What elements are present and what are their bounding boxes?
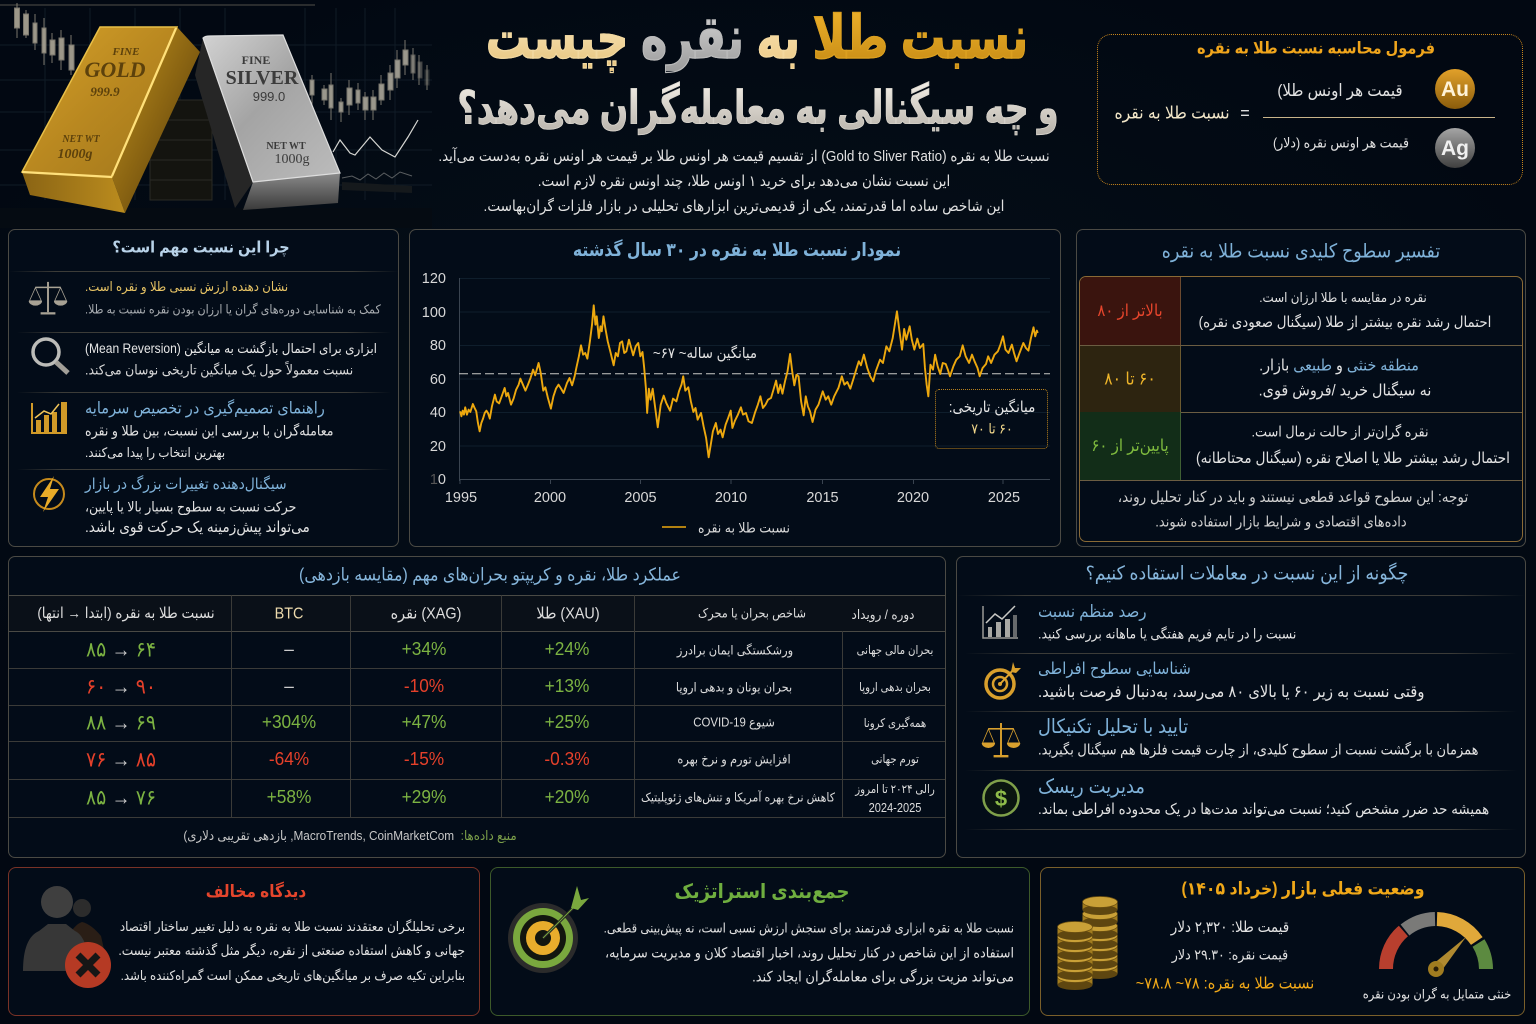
table header: (XAU) طلا bbox=[536, 605, 600, 622]
heading: چرا این نسبت مهم است؟ bbox=[112, 239, 290, 256]
panel: strategic summary: می‌تواند مزیت بزرگی برای معامله‌گران ایجاد کند. bbox=[752, 969, 1014, 985]
level 60 to 80: نه سیگنال خرید /فروش قوی. bbox=[1259, 382, 1431, 399]
icon: green target bbox=[508, 886, 589, 973]
panel: strategic summary bbox=[490, 867, 1030, 1016]
line chart: 80 bbox=[430, 338, 446, 354]
heading: چگونه از این نسبت در معاملات استفاده کنیم؟ bbox=[1086, 564, 1408, 585]
table heading: عملکرد طلا، نقره و کریپتو بحران‌های مهم (مقایسه بازدهی) bbox=[299, 564, 681, 584]
row: covid: همه‌گیری کرونا bbox=[864, 716, 926, 730]
row: covid: شیوع COVID-19 bbox=[693, 715, 775, 729]
panel: why it matters bbox=[8, 229, 399, 547]
item 3: راهنمای تصمیم‌گیری در تخصیص سرمایه bbox=[85, 399, 325, 417]
intro text: نسبت طلا به نقره (Gold to Sliver Ratio) از تقسیم قیمت هر اونس طلا بر قیمت هر اونس نقره به‌دست می‌آید. bbox=[438, 148, 1050, 165]
panel: why it matters: می‌تواند پیش‌زمینه یک حرکت قوی باشد. bbox=[85, 519, 310, 536]
intro text bbox=[438, 147, 1050, 215]
right candles bbox=[310, 40, 429, 122]
stacked shadow bars bbox=[150, 100, 212, 200]
table header: (XAG) نقره bbox=[391, 605, 461, 622]
table header: شاخص بحران یا محرک bbox=[698, 606, 806, 620]
panel: level interpretation bbox=[1076, 229, 1526, 547]
denominator: قیمت هر اونس نقره (دلار) bbox=[1273, 135, 1409, 151]
line chart: 40 bbox=[430, 405, 446, 421]
row: 2024 rally: +20% bbox=[545, 787, 589, 807]
gold bar: NET WT bbox=[61, 134, 101, 145]
hero illustration: gold and silver bars bbox=[0, 3, 432, 213]
icon: Ag: Ag bbox=[1441, 137, 1469, 160]
icon: Ag bbox=[1435, 128, 1475, 168]
row: inflation: ۷۶ → ۸۵ bbox=[86, 748, 156, 771]
line chart: 2010 bbox=[715, 490, 747, 506]
row: inflation bbox=[86, 748, 919, 771]
level above 80: احتمال رشد نقره بیشتر از طلا (سیگنال صعودی نقره) bbox=[1199, 315, 1491, 331]
formula heading: فرمول محاسبه نسبت طلا به نقره bbox=[1197, 39, 1435, 57]
icon: Au: Au bbox=[1441, 78, 1469, 101]
row: european debt crisis: ۶۰ → ۹۰ bbox=[86, 675, 156, 698]
level above 80 bbox=[1080, 277, 1522, 346]
icon: gold scales bbox=[982, 723, 1020, 758]
line chart: 100 bbox=[422, 305, 446, 321]
row: 2024 rally: 2024-2025 bbox=[869, 800, 921, 815]
intro text: این نسبت نشان می‌دهد برای خرید ۱ اونس طلا، چند اونس نقره لازم است. bbox=[538, 173, 950, 190]
level above 80: بالاتر از ۸۰ bbox=[1097, 301, 1163, 320]
row: 2024 rally bbox=[86, 782, 935, 815]
levels table bbox=[1079, 276, 1523, 542]
heading: تفسیر سطوح کلیدی نسبت طلا به نقره bbox=[1162, 240, 1440, 262]
step 3: تایید با تحلیل تکنیکال bbox=[1038, 716, 1188, 738]
row: european debt crisis: – bbox=[284, 676, 294, 696]
panel: opposing view bbox=[8, 867, 480, 1016]
icon: magnifier bbox=[31, 337, 70, 375]
average line label: میانگین ساله~ ۶۷~ bbox=[653, 346, 757, 362]
icon: monitoring chart bbox=[982, 606, 1018, 639]
legend: نسبت طلا به نقره bbox=[698, 520, 790, 536]
icon: gold target bbox=[984, 662, 1021, 700]
heading: دیدگاه مخالف bbox=[206, 882, 306, 901]
row: global financial crisis: +34% bbox=[402, 639, 446, 659]
panel: opposing view: بنابراین تکیه صرف بر میانگین‌های تاریخی ممکن است گمراه‌کننده باشد. bbox=[121, 968, 465, 983]
table header: دوره / رویداد bbox=[852, 607, 914, 622]
panel: why it matters: کمک به شناسایی دوره‌های گران یا ارزان بودن نقره نسبت به طلا. bbox=[85, 303, 381, 317]
step 4: مدیریت ریسک bbox=[1038, 776, 1145, 798]
icon: scales bbox=[28, 282, 68, 314]
row: covid bbox=[86, 711, 926, 734]
line chart: 2015 bbox=[806, 490, 839, 506]
panel: how to use bbox=[956, 556, 1526, 858]
line chart: 10 bbox=[430, 472, 446, 488]
row: european debt crisis: -10% bbox=[404, 676, 444, 696]
row: 2024 rally: +58% bbox=[267, 787, 311, 807]
row: european debt crisis bbox=[86, 675, 931, 698]
level below 60 bbox=[1080, 412, 1522, 481]
ratio label: نسبت طلا به نقره bbox=[1114, 103, 1230, 123]
silver bar: NET WT bbox=[266, 141, 306, 152]
equals sign: = bbox=[1240, 103, 1250, 123]
row: global financial crisis: – bbox=[284, 639, 294, 659]
level below 60: نقره گران‌تر از حالت نرمال است. bbox=[1251, 424, 1429, 440]
fraction bar bbox=[1263, 117, 1495, 118]
line chart: 2000 bbox=[534, 490, 566, 506]
chart heading: نمودار نسبت طلا به نقره در ۳۰ سال گذشته bbox=[573, 239, 901, 260]
panel: performance table bbox=[8, 556, 946, 858]
line chart: 2005 bbox=[624, 490, 657, 506]
intro text: این شاخص ساده اما قدرتمند، یکی از قدیمی‌ترین ابزارهای تحلیلی در بازار فلزات گران‌بهاست. bbox=[484, 198, 1004, 215]
row: 2024 rally: +29% bbox=[402, 787, 446, 807]
gold bar: GOLD bbox=[84, 57, 146, 82]
icon: dollar: $ bbox=[995, 786, 1007, 811]
row: 2024 rally: رالی ۲۰۲۴ تا امروز bbox=[855, 782, 935, 796]
line chart: 1995 bbox=[445, 490, 477, 506]
heading: جمع‌بندی استراتژیک bbox=[674, 881, 850, 903]
icon: Au bbox=[1435, 69, 1475, 109]
line chart: 120 bbox=[422, 271, 446, 287]
subtitle: و چه سیگنالی به معامله‌گران می‌دهد؟ bbox=[457, 81, 1059, 133]
row: global financial crisis bbox=[86, 638, 933, 661]
gold bar bbox=[22, 27, 200, 213]
row: global financial crisis: بحران مالی جهانی bbox=[857, 643, 933, 657]
table header: BTC bbox=[275, 605, 303, 622]
item 1: نشان دهنده ارزش نسبی طلا و نقره است. bbox=[85, 279, 288, 294]
item 2: ابزاری برای احتمال بازگشت به میانگین (Mean Reversion) bbox=[85, 341, 377, 356]
panel: 30-year chart bbox=[409, 229, 1061, 547]
body text: نسبت طلا به نقره ابزاری قدرتمند برای سنجش ارزش نسبی است، نه پیش‌بینی قطعی. bbox=[604, 920, 1014, 935]
row: covid: ۸۸ → ۶۹ bbox=[86, 711, 156, 734]
level below 60: پایین‌تر از ۶۰ bbox=[1091, 436, 1169, 455]
step 2: شناسایی سطوح افراطی bbox=[1038, 660, 1191, 678]
table header: نسبت طلا به نقره (ابتدا → انتها) bbox=[37, 605, 215, 622]
line chart: 2020 bbox=[897, 490, 929, 506]
body text: برخی تحلیلگران معتقدند نسبت طلا به نقره به دلیل تغییر ساختار اقتصاد bbox=[120, 919, 465, 934]
line chart: 60 bbox=[430, 372, 446, 388]
level 60 to 80: منطقه خنثی و طبیعی بازار. bbox=[1259, 357, 1419, 374]
gold bar: 1000g bbox=[58, 147, 92, 162]
row: inflation: -15% bbox=[404, 749, 444, 769]
panel: how to use: وقتی نسبت به زیر ۶۰ یا بالای ۸۰ می‌رسد، به‌دنبال فرصت باشید. bbox=[1038, 683, 1424, 701]
icon: coin stacks bbox=[1057, 896, 1118, 990]
icon: dollar bbox=[982, 779, 1020, 817]
callout: historical average bbox=[935, 389, 1048, 449]
silver bar: 999.0 bbox=[253, 89, 285, 104]
gold price: قیمت طلا: ۲,۳۲۰ دلار bbox=[1171, 919, 1289, 936]
row: european debt crisis: +13% bbox=[545, 676, 589, 696]
row: inflation: -0.3% bbox=[544, 749, 590, 769]
level 60 to 80 bbox=[1080, 346, 1522, 413]
silver bar bbox=[195, 35, 340, 210]
row: european debt crisis: بحران بدهی اروپا bbox=[859, 680, 931, 694]
silver bar: 1000g bbox=[274, 152, 310, 167]
row: covid: +25% bbox=[545, 712, 589, 732]
panel: formula bbox=[1097, 34, 1523, 185]
row: inflation: -64% bbox=[269, 749, 309, 769]
panel: why it matters: حرکت نسبت به سطوح بسیار بالا یا پایین، bbox=[85, 499, 296, 515]
panel: opposing view: جهانی و کاهش استفاده صنعتی از نقره، دیگر مثل گذشته معتبر نیست. bbox=[118, 943, 465, 958]
level above 80: نقره در مقایسه با طلا ارزان است. bbox=[1259, 290, 1427, 305]
title: نسبت طلا به نقره چیست bbox=[486, 4, 1028, 71]
row: european debt crisis: بحران یونان و بدهی اروپا bbox=[676, 680, 792, 694]
row: 2024 rally: ۸۵ → ۷۶ bbox=[86, 786, 156, 809]
icon: people with cross bbox=[23, 886, 111, 988]
row: global financial crisis: ورشکستگی ایمان برادرز bbox=[677, 643, 793, 657]
panel: why it matters: بهترین انتخاب را پیدا می‌کنند. bbox=[85, 445, 225, 460]
left candles bbox=[14, 3, 74, 75]
table header bbox=[37, 605, 914, 622]
callout: historical average: ۶۰ تا ۷۰ bbox=[971, 421, 1013, 437]
row: 2024 rally: کاهش نرخ بهره آمریکا و تنش‌های ژئوپلیتیک bbox=[641, 791, 835, 805]
gold bar: FINE bbox=[112, 46, 139, 58]
row: covid: +47% bbox=[402, 712, 446, 732]
row: inflation: تورم جهانی bbox=[871, 752, 919, 766]
line chart: 20 bbox=[430, 439, 446, 455]
row: global financial crisis: +24% bbox=[545, 639, 589, 659]
panel: how to use: همزمان با برگشت نسبت از سطوح کلیدی، از چارت قیمت فلزها هم سیگنال بگیرید. bbox=[1038, 742, 1478, 758]
silver price: قیمت نقره: ۲۹.۳۰ دلار bbox=[1172, 947, 1288, 963]
gauge bbox=[1379, 912, 1493, 977]
heading: وضعیت فعلی بازار (خرداد ۱۴۰۵) bbox=[1181, 878, 1425, 898]
panel: how to use: همیشه حد ضرر مشخص کنید؛ نسبت می‌تواند مدت‌ها در یک محدوده افراطی بماند. bbox=[1038, 802, 1489, 818]
icon: bar chart gold bbox=[31, 402, 67, 434]
level 60 to 80: ۶۰ تا ۸۰ bbox=[1104, 369, 1156, 389]
gauge label: خنثی متمایل به گران بودن نقره bbox=[1363, 986, 1511, 1001]
silver bar: FINE bbox=[242, 53, 270, 67]
panel: why it matters: نسبت معمولاً حول یک میانگین تاریخی نوسان می‌کند. bbox=[85, 363, 353, 378]
panel: why it matters: معامله‌گران با بررسی این نسبت، بین طلا و نقره bbox=[85, 423, 334, 439]
item 4: سیگنال‌دهنده تغییرات بزرگ در بازار bbox=[85, 476, 287, 493]
panel: market status bbox=[1040, 867, 1525, 1016]
row: inflation: افزایش تورم و نرخ بهره bbox=[677, 752, 791, 766]
note: توجه: این سطوح قواعد قطعی نیستند و باید در کنار تحلیل روند، bbox=[1118, 489, 1468, 506]
numerator: قیمت هر اونس طلا) bbox=[1277, 81, 1403, 100]
data source: منبع داده‌ها: MacroTrends, CoinMarketCom, بازدهی تقریبی دلاری) bbox=[183, 828, 517, 843]
ratio value: نسبت طلا به نقره: ۷۸~ ۷۸.۸~ bbox=[1136, 974, 1314, 992]
icon: lightning bbox=[33, 476, 65, 512]
silver bar: SILVER bbox=[226, 67, 299, 89]
row: global financial crisis: ۸۵ → ۶۴ bbox=[86, 638, 156, 661]
step 1: رصد منظم نسبت bbox=[1038, 602, 1147, 621]
callout: historical average: میانگین تاریخی: bbox=[949, 399, 1035, 416]
levels table: داده‌های اقتصادی و شرایط بازار استفاده شوند. bbox=[1155, 514, 1407, 530]
gold bar: 999.9 bbox=[90, 84, 120, 99]
level below 60: احتمال رشد بیشتر طلا یا اصلاح نقره (سیگنال محتاطانه) bbox=[1196, 450, 1510, 467]
panel: strategic summary: استفاده از این شاخص در کنار تحلیل روند، اخبار اقتصاد کلان و مدیریت سرمایه، bbox=[605, 945, 1014, 961]
line chart bbox=[422, 271, 1050, 528]
line chart: 2025 bbox=[988, 490, 1020, 506]
panel: how to use: نسبت را در تایم فریم هفتگی یا ماهانه بررسی کنید. bbox=[1038, 627, 1296, 642]
row: covid: +304% bbox=[262, 712, 316, 732]
